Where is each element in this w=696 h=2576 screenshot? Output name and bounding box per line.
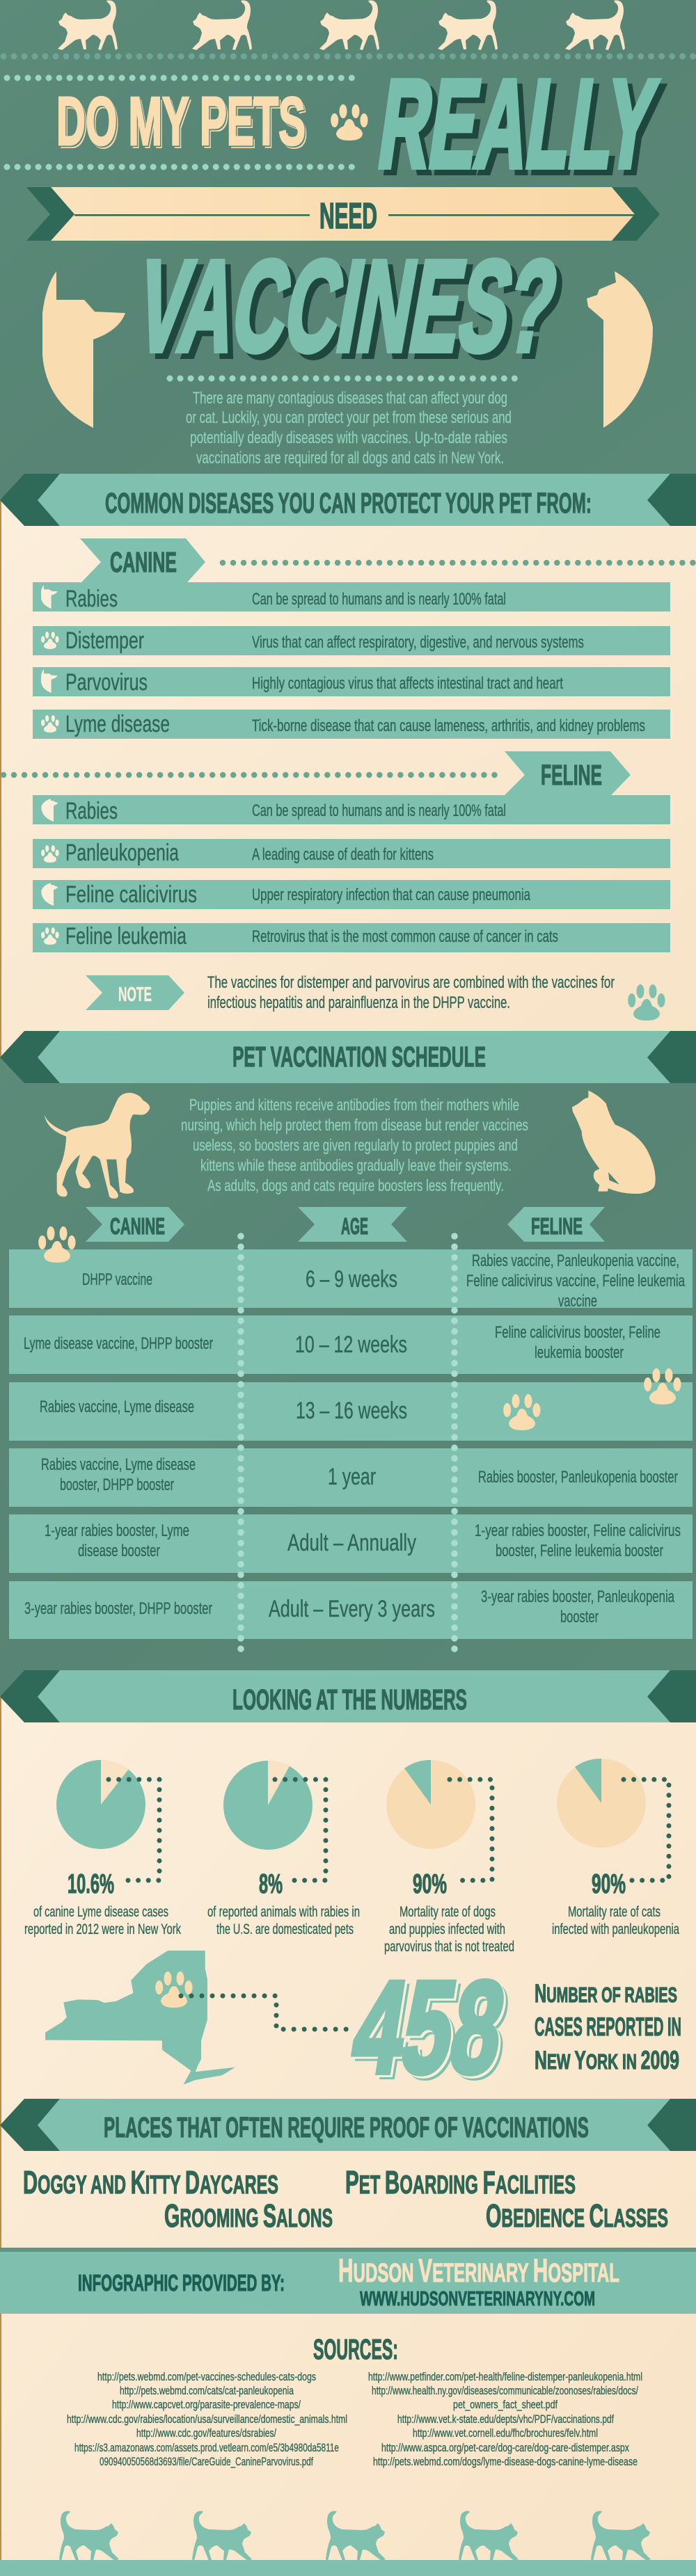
row: 10-12 weeks <box>24 1323 661 1362</box>
pie captions <box>24 1904 679 1955</box>
percent labels: 90% <box>413 1869 447 1899</box>
tag: canine <box>80 538 205 582</box>
row: distemper: Distemper <box>65 627 144 654</box>
places list <box>23 2164 668 2234</box>
row: feline rabies: Can be spread to humans and is nearly 100% fatal <box>252 801 506 820</box>
row: parvovirus: Highly contagious virus that affects intestinal tract and heart <box>252 674 563 693</box>
bottom row of walking cats <box>59 2511 651 2561</box>
icon: table paw right <box>644 1368 681 1405</box>
row: lyme disease: Lyme disease <box>65 711 170 737</box>
row: 6-9 weeks: vaccine <box>558 1292 597 1311</box>
stat caption: NEW YORK IN 2009 <box>535 2046 679 2074</box>
background: teal intro <box>0 0 696 500</box>
row: feline calicivirus: Upper respiratory infection that can cause pneumonia <box>252 886 530 904</box>
places list: DOGGY AND KITTY DAYCARES <box>23 2164 278 2200</box>
sources list: http://pets.webmd.com/cats/cat-panleukopenia <box>120 2384 294 2397</box>
row: adult annually <box>45 1521 681 1560</box>
percent labels: 8% <box>259 1869 283 1899</box>
pie captions: Mortality rate of dogs <box>400 1904 496 1920</box>
row: adult every 3 years: Adult – Every 3 years <box>269 1596 435 1622</box>
icon: sitting cat silhouette <box>572 1091 656 1194</box>
icon: table paw center <box>503 1394 540 1430</box>
note: infectious hepatitis and parainfluenza in the DHPP vaccine. <box>207 993 510 1012</box>
tag: canine: CANINE <box>110 546 177 578</box>
schedule rows background <box>9 1249 693 1639</box>
sources list: http://pets.webmd.com/pet-vaccines-schedules-cats-dogs <box>97 2370 316 2383</box>
icon: cat head right <box>587 271 653 428</box>
pie captions: Mortality rate of cats <box>568 1904 661 1920</box>
footer provider bar <box>0 2248 696 2314</box>
row: feline rabies <box>33 795 670 824</box>
schedule intro text: useless, so boosters are given regularly to protect puppies and <box>193 1136 518 1154</box>
row: panleukopenia: Panleukopenia <box>65 840 179 866</box>
banner: looking at the numbers <box>0 1670 696 1722</box>
row: adult annually: disease booster <box>78 1542 160 1560</box>
footer provider bar: INFOGRAPHIC PROVIDED BY: <box>78 2270 285 2296</box>
row: 1 year <box>41 1455 678 1494</box>
icon: canine paw <box>38 1226 75 1263</box>
intro text: vaccinations are required for all dogs and cats in New York. <box>196 449 504 467</box>
places list: PET BOARDING FACILITIES <box>345 2164 576 2200</box>
schedule intro text: As adults, dogs and cats require boosters less frequently. <box>207 1176 504 1194</box>
row: lyme disease <box>33 710 670 739</box>
row: 6-9 weeks: 6 – 9 weeks <box>306 1266 397 1293</box>
row: 10-12 weeks: leukemia booster <box>535 1343 624 1362</box>
ribbon: need <box>26 187 660 241</box>
banner: pet vaccination schedule: PET VACCINATION SCHEDULE <box>232 1041 486 1073</box>
row: feline rabies: Rabies <box>65 798 118 824</box>
schedule intro text <box>181 1096 528 1194</box>
pie captions: the U.S. are domesticated pets <box>216 1921 354 1937</box>
row: 10-12 weeks: Lyme disease vaccine, DHPP booster <box>24 1334 213 1353</box>
schedule table text <box>24 1251 685 1626</box>
sources list: http://www.vet.k-state.edu/depts/vhc/PDF/vaccinations.pdf <box>397 2413 614 2426</box>
row: panleukopenia: A leading cause of death for kittens <box>252 845 434 864</box>
row: 13-16 weeks: Rabies vaccine, Lyme disease <box>40 1398 194 1416</box>
intro text: or cat. Luckily, you can protect your pet from these serious and <box>186 408 512 427</box>
stat: 458: 458 <box>347 1957 516 2103</box>
intro text: potentially deadly diseases with vaccines. Up-to-date rabies <box>190 429 507 447</box>
title: do my pets <box>56 83 308 162</box>
bottom bar <box>0 2560 696 2576</box>
header: canine <box>86 1207 184 1242</box>
percent labels <box>68 1869 626 1899</box>
percent labels: 10.6% <box>68 1869 114 1899</box>
row: 6-9 weeks: DHPP vaccine <box>82 1270 152 1289</box>
tag: feline: FELINE <box>541 759 602 791</box>
pie captions: parvovirus that is not treated <box>384 1939 514 1955</box>
banner: pet vaccination schedule <box>0 1031 696 1083</box>
intro text: There are many contagious diseases that can affect your dog <box>193 389 507 408</box>
row: distemper <box>33 626 670 655</box>
sources list <box>67 2370 642 2468</box>
title: do my pets: DO MY PETS <box>56 83 306 159</box>
row: 13-16 weeks: 13 – 16 weeks <box>296 1398 407 1424</box>
pie captions: and puppies infected with <box>389 1921 505 1937</box>
row: adult annually: 1-year rabies booster, Lyme <box>45 1521 189 1540</box>
map: New York state <box>45 1951 235 2085</box>
intro text <box>186 389 512 467</box>
row: rabies: Can be spread to humans and is nearly 100% fatal <box>252 590 506 609</box>
sources list: https://s3.amazonaws.com/assets.prod.vetlearn.com/e5/3b4980da5811e <box>74 2441 339 2454</box>
row: adult every 3 years: booster <box>560 1608 599 1626</box>
footer provider bar: HUDSON VETERINARY HOSPITAL <box>338 2252 619 2289</box>
row: panleukopenia <box>33 839 670 868</box>
schedule intro text: Puppies and kittens receive antibodies from their mothers while <box>189 1096 519 1114</box>
row: 1 year: Rabies vaccine, Lyme disease <box>41 1455 196 1474</box>
header: feline: FELINE <box>531 1213 583 1239</box>
pie chart: 8% <box>223 1761 313 1850</box>
banner: places requiring proof <box>0 2099 696 2151</box>
dotted connectors <box>109 1779 669 1880</box>
header: age: AGE <box>341 1213 368 1239</box>
title: do my pets: DO MY PETS <box>58 86 308 162</box>
sources list: http://www.cdc.gov/features/dsrabies/ <box>136 2426 276 2440</box>
note: NOTE <box>118 984 152 1006</box>
ribbon: need: NEED <box>319 196 377 237</box>
icon: dog silhouette <box>45 1093 150 1199</box>
row: adult annually: Adult – Annually <box>287 1530 416 1556</box>
row: parvovirus: Parvovirus <box>65 669 148 696</box>
icon: map paw <box>155 1971 192 2008</box>
icon: note paw <box>628 984 665 1021</box>
row: adult every 3 years <box>24 1587 674 1626</box>
row: rabies: Rabies <box>65 586 118 612</box>
row: feline leukemia: Feline leukemia <box>65 923 187 950</box>
row: adult every 3 years: 3-year rabies booster, DHPP booster <box>24 1599 212 1618</box>
schedule intro text: kittens while these antibodies gradually leave their systems. <box>200 1156 512 1174</box>
pie chart: 90% cats <box>557 1759 646 1848</box>
background: cream numbers <box>0 1697 696 2576</box>
row: parvovirus <box>33 667 670 696</box>
sources heading: SOURCES: <box>313 2333 398 2365</box>
header: feline <box>507 1207 605 1242</box>
row: 1 year: 1 year <box>328 1464 376 1490</box>
stat: 458: 458 <box>349 1959 518 2105</box>
pie chart: 10.6% <box>56 1760 145 1849</box>
sources list: http://www.capcvet.org/parasite-prevalence-maps/ <box>112 2398 301 2411</box>
icon: title paw <box>331 104 367 141</box>
row: feline leukemia <box>33 923 670 952</box>
row: feline leukemia: Retrovirus that is the most common cause of cancer in cats <box>252 927 558 946</box>
sources list: http://www.cdc.gov/rabies/location/usa/surveillance/domestic_animals.html <box>67 2413 347 2426</box>
sources list: http://www.vet.cornell.edu/fhc/brochures/felv.html <box>413 2426 598 2440</box>
pie chart: 90% dogs <box>386 1760 475 1849</box>
row: 6-9 weeks <box>82 1251 685 1311</box>
pie captions: reported in 2012 were in New York <box>24 1921 181 1937</box>
schedule intro text: nursing, which help protect them from disease but render vaccines <box>181 1116 528 1134</box>
row: 10-12 weeks: 10 – 12 weeks <box>295 1331 407 1358</box>
percent labels: 90% <box>592 1869 626 1899</box>
tag: feline <box>505 751 631 795</box>
panel: canine diseases <box>33 582 670 739</box>
row: 1 year: booster, DHPP booster <box>60 1475 174 1494</box>
background: cream diseases <box>0 500 696 1057</box>
header: age <box>298 1207 407 1242</box>
row: 13-16 weeks <box>40 1398 407 1424</box>
header: canine: CANINE <box>110 1213 165 1239</box>
stat: 458: 458 <box>345 1955 514 2101</box>
sources list: pet_owners_fact_sheet.pdf <box>453 2398 557 2411</box>
panel: feline diseases <box>33 795 670 952</box>
pie captions: of canine Lyme disease cases <box>33 1904 168 1920</box>
pie captions: of reported animals with rabies in <box>207 1904 360 1920</box>
row: rabies <box>33 582 670 612</box>
row: feline calicivirus <box>33 880 670 909</box>
icon: dog head left <box>42 271 125 428</box>
banner: looking at the numbers: LOOKING AT THE NUMBERS <box>232 1683 467 1715</box>
banner: common diseases <box>0 474 696 526</box>
title: do my pets: DO MY PETS <box>57 84 306 161</box>
top row of walking cats <box>58 0 625 50</box>
row: feline calicivirus: Feline calicivirus <box>65 881 197 908</box>
places list: GROOMING SALONS <box>164 2198 333 2234</box>
stat caption <box>535 1979 681 2074</box>
note <box>86 973 615 1012</box>
sources list: 090940050568d3693/file/CareGuide_CanineParvovirus.pdf <box>100 2455 313 2468</box>
background: teal schedule <box>0 1057 696 1697</box>
